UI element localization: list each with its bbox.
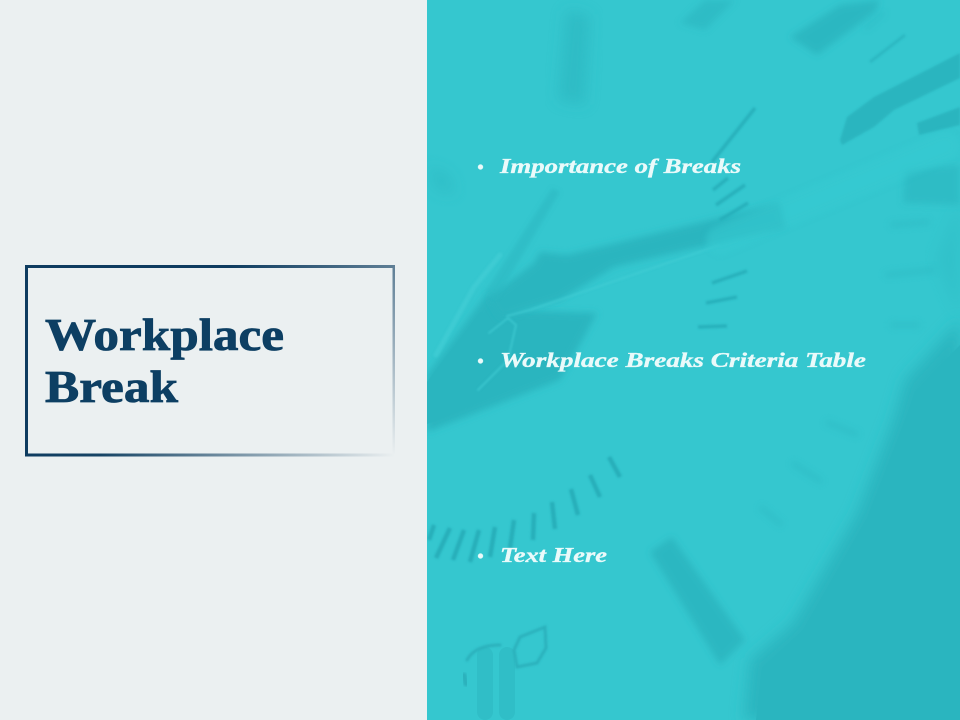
blurred dark regions of the photo xyxy=(427,0,960,720)
bullet item: Text Here: Text Here xyxy=(500,543,607,567)
heading: Workplace Break: Break xyxy=(45,361,178,412)
bullet item: Text Here xyxy=(478,543,607,567)
clock hand highlights xyxy=(435,206,782,390)
bullet item: Importance of Breaks: Importance of Breaks xyxy=(499,154,741,178)
panel: title frame xyxy=(25,265,395,456)
heading: Workplace Break: Workplace xyxy=(45,309,284,360)
scissors silhouette xyxy=(464,627,546,712)
panel: right teal clock photo xyxy=(427,0,960,720)
bullet item: Workplace Breaks Criteria Table: Workplace Breaks Criteria Table xyxy=(500,348,866,372)
heading: Workplace Break xyxy=(45,309,284,412)
panel: left background xyxy=(0,0,427,720)
bullet list xyxy=(478,154,866,567)
clock tick marks xyxy=(429,12,935,562)
